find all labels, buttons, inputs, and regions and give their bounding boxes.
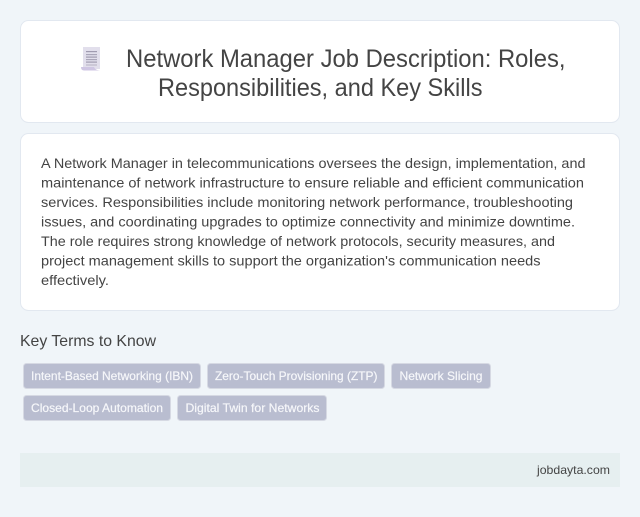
- description text: services. Responsibilities include monitoring network performance, troubleshooting: [41, 194, 573, 210]
- tag: digital twin: [178, 396, 326, 420]
- description text: A Network Manager in telecommunications oversees the design, implementation, and: [41, 155, 586, 171]
- panel: title card: [20, 20, 620, 122]
- heading: key terms: Key Terms to Know: [20, 333, 156, 350]
- title: Responsibilities, and Key Skills: [158, 74, 482, 102]
- panel: description card: [20, 134, 620, 310]
- tag: intent-based networking: Intent-Based Networking (IBN): [31, 369, 193, 383]
- title: [126, 45, 566, 102]
- icon: document scroll: [81, 47, 100, 70]
- description text: effectively.: [41, 272, 109, 288]
- tag: digital twin: Digital Twin for Networks: [186, 401, 320, 415]
- description text: maintenance of network infrastructure to ensure reliable and efficient communication: [41, 174, 584, 190]
- tag: closed-loop automation: Closed-Loop Automation: [31, 401, 163, 415]
- description text: issues, and coordinating upgrades to optimize connectivity and minimize downtime.: [41, 214, 575, 230]
- tag: intent-based networking: [24, 364, 200, 388]
- description text: [41, 155, 586, 288]
- tag: network slicing: Network Slicing: [400, 369, 482, 383]
- tag: closed-loop automation: [24, 396, 170, 420]
- title: Network Manager Job Description: Roles,: [126, 45, 566, 73]
- tag: zero-touch provisioning: Zero-Touch Provisioning (ZTP): [215, 369, 378, 383]
- footer brand: jobdayta.com: [536, 463, 610, 477]
- tag: zero-touch provisioning: [208, 364, 384, 388]
- tag: network slicing: [392, 364, 490, 388]
- description text: The role requires strong knowledge of network protocols, security measures, and: [41, 233, 555, 249]
- footer bar: [20, 453, 620, 487]
- description text: project management skills to support the organization's communication needs: [41, 252, 540, 268]
- tag list: [24, 364, 490, 420]
